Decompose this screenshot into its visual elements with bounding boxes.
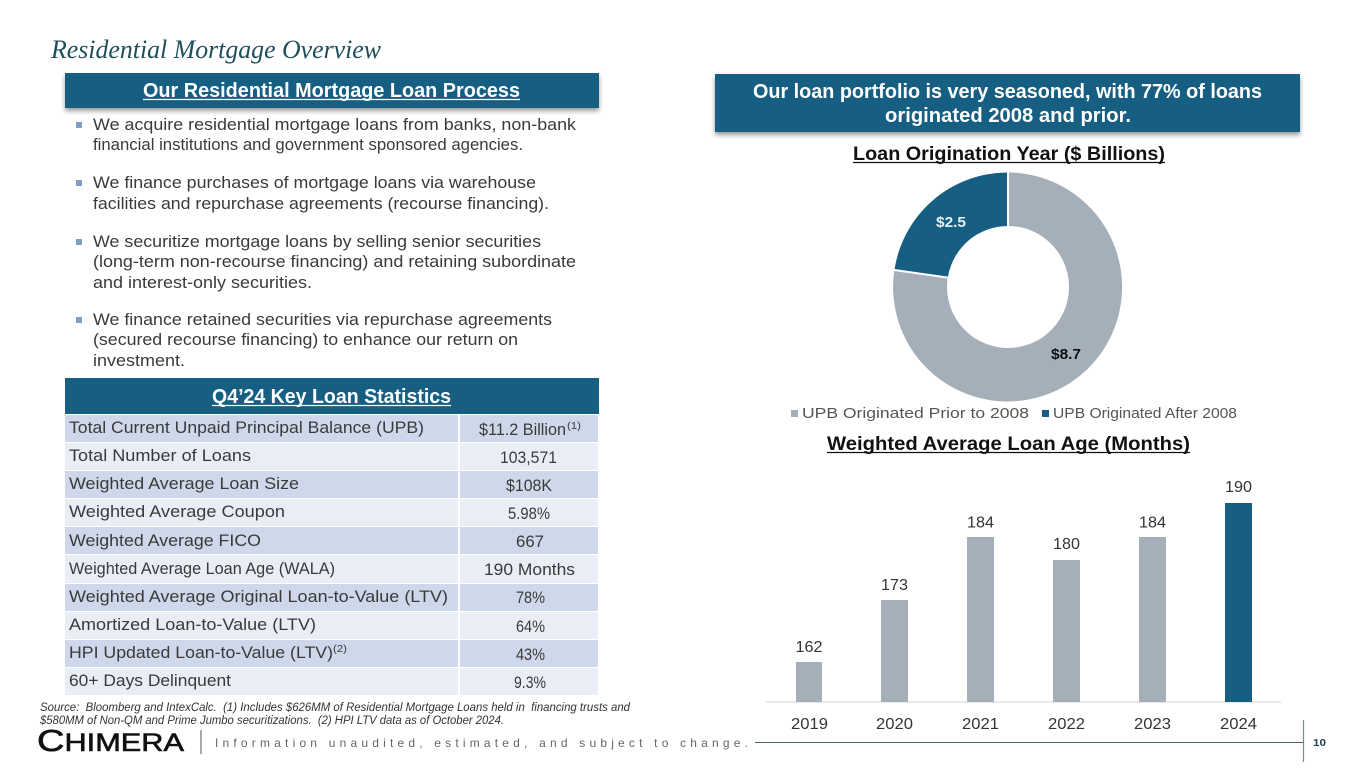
text block: loan process bullets: (secured recourse financing) to enhance our return on <box>93 331 518 349</box>
text block: source footnote: $580MM of Non-QM and Prime Jumbo securitizations. (2) HPI LTV data as of October 2024. <box>39 715 504 727</box>
chart: donut loan origination year: $2.5 <box>936 214 966 231</box>
heading: loan origination year: Loan Origination Year ($ Billions) <box>853 144 1165 165</box>
table: key loan statistics: 667 <box>516 533 544 551</box>
table: key loan statistics: Amortized Loan-to-Value (LTV) <box>69 616 316 634</box>
text block: loan process bullets: We securitize mortgage loans by selling senior securities <box>93 233 541 251</box>
chart: loan age bars: 2022 <box>1048 716 1085 733</box>
text block: source footnote: Source: Bloomberg and IntexCalc. (1) Includes $626MM of Residential Mortgage Loans held in financing trusts and <box>40 702 631 714</box>
text block: loan process bullets: (long-term non-recourse financing) and retaining subordinate <box>93 253 576 271</box>
legend: donut: UPB Originated Prior to 2008 <box>802 405 1029 422</box>
table: key loan statistics: HPI Updated Loan-to-Value (LTV) <box>69 644 333 662</box>
footer rule and page number: 10 <box>1313 737 1326 749</box>
panel: key loan statistics heading <box>65 378 599 414</box>
chart: donut loan origination year: $8.7 <box>1051 346 1081 363</box>
table: key loan statistics: 190 Months <box>484 561 575 579</box>
chart: loan age bars: 190 <box>1225 479 1252 496</box>
legend: donut: UPB Originated After 2008 <box>1053 405 1237 422</box>
panel: loan process heading: Our Residential Mortgage Loan Process <box>143 80 520 102</box>
text block: disclaimer: Information unaudited, estimated, and subject to change. <box>215 736 748 750</box>
table: key loan statistics: Weighted Average Loan Size <box>69 475 299 493</box>
chart: loan age bars: 2019 <box>791 716 828 733</box>
chart: loan age bars: 180 <box>1053 536 1080 553</box>
title: Residential Mortgage Overview <box>50 35 382 64</box>
table: key loan statistics: Weighted Average Loan Age (WALA) <box>69 560 335 578</box>
chart: loan age bars: 2021 <box>962 716 999 733</box>
panel: portfolio callout: originated 2008 and prior. <box>885 105 1131 127</box>
text block: source footnote <box>39 702 631 727</box>
chart: loan age bars: 162 <box>796 639 822 656</box>
chart: loan age bars <box>766 479 1281 733</box>
table: key loan statistics: 43% <box>516 646 545 664</box>
table: key loan statistics: Weighted Average FICO <box>69 532 261 550</box>
footer divider <box>200 730 202 754</box>
table: key loan statistics: 64% <box>516 618 545 636</box>
chart: loan age bars: 2020 <box>876 716 913 733</box>
table: key loan statistics: Total Number of Loans <box>69 447 251 465</box>
table: key loan statistics: 5.98% <box>508 505 550 523</box>
table: key loan statistics <box>65 415 598 695</box>
text block: loan process bullets: We acquire residential mortgage loans from banks, non-bank <box>93 116 577 134</box>
table: key loan statistics: 103,571 <box>500 449 557 467</box>
panel: portfolio callout <box>715 74 1300 132</box>
logo: Chimera: CHIMERA <box>37 723 184 758</box>
chart: loan age bars: 2024 <box>1220 716 1257 733</box>
text block: loan process bullets: We finance purchases of mortgage loans via warehouse <box>93 174 536 192</box>
table: key loan statistics: 60+ Days Delinquent <box>69 672 231 690</box>
table: key loan statistics: Weighted Average Original Loan-to-Value (LTV) <box>69 588 448 606</box>
table: key loan statistics: (1) <box>567 421 581 432</box>
text block: loan process bullets: investment. <box>93 352 185 370</box>
table: key loan statistics: 78% <box>516 589 545 607</box>
text block: loan process bullets: We finance retained securities via repurchase agreements <box>93 311 552 329</box>
text block: loan process bullets: and interest-only securities. <box>93 274 312 292</box>
text block: loan process bullets: financial institutions and government sponsored agencies. <box>93 136 523 154</box>
panel: loan process heading <box>65 73 599 108</box>
heading: weighted average loan age: Weighted Average Loan Age (Months) <box>827 434 1190 455</box>
table: key loan statistics: Weighted Average Coupon <box>69 503 285 521</box>
chart: loan age bars: 184 <box>967 514 994 532</box>
table: key loan statistics: 9.3% <box>514 674 546 692</box>
chart: donut loan origination year <box>893 172 1122 401</box>
panel: portfolio callout: Our loan portfolio is very seasoned, with 77% of loans <box>753 81 1262 103</box>
text block: loan process bullets <box>76 116 577 370</box>
table: key loan statistics: $11.2 Billion <box>479 421 566 439</box>
chart: loan age bars: 184 <box>1139 514 1166 532</box>
legend: donut <box>791 405 1237 422</box>
table: key loan statistics: Total Current Unpaid Principal Balance (UPB) <box>69 419 424 437</box>
text block: loan process bullets: facilities and repurchase agreements (recourse financing). <box>93 195 549 213</box>
chart: loan age bars: 173 <box>881 577 908 594</box>
panel: key loan statistics heading: Q4’24 Key Loan Statistics <box>212 386 451 408</box>
table: key loan statistics: (2) <box>333 644 347 655</box>
table: key loan statistics: $108K <box>506 477 552 495</box>
chart: loan age bars: 2023 <box>1134 716 1171 733</box>
